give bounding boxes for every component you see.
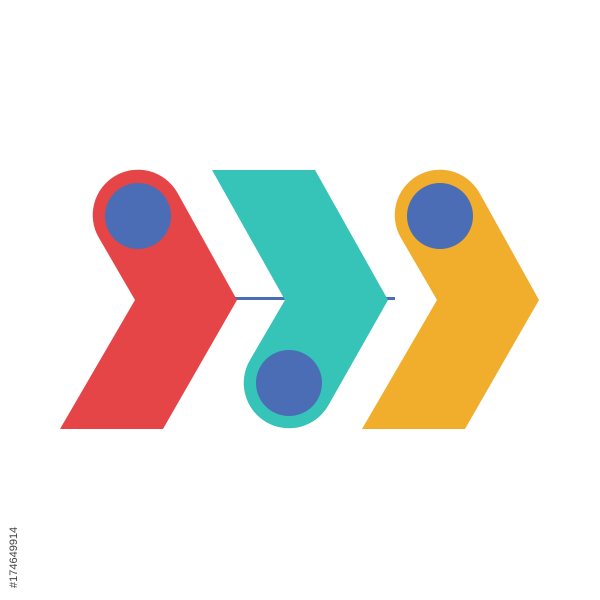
connector line (235, 297, 395, 300)
chevron: red (60, 170, 237, 429)
chevron: yellow (362, 170, 539, 429)
chevron: teal (212, 170, 388, 428)
stock id text: #174649914 (8, 527, 20, 588)
